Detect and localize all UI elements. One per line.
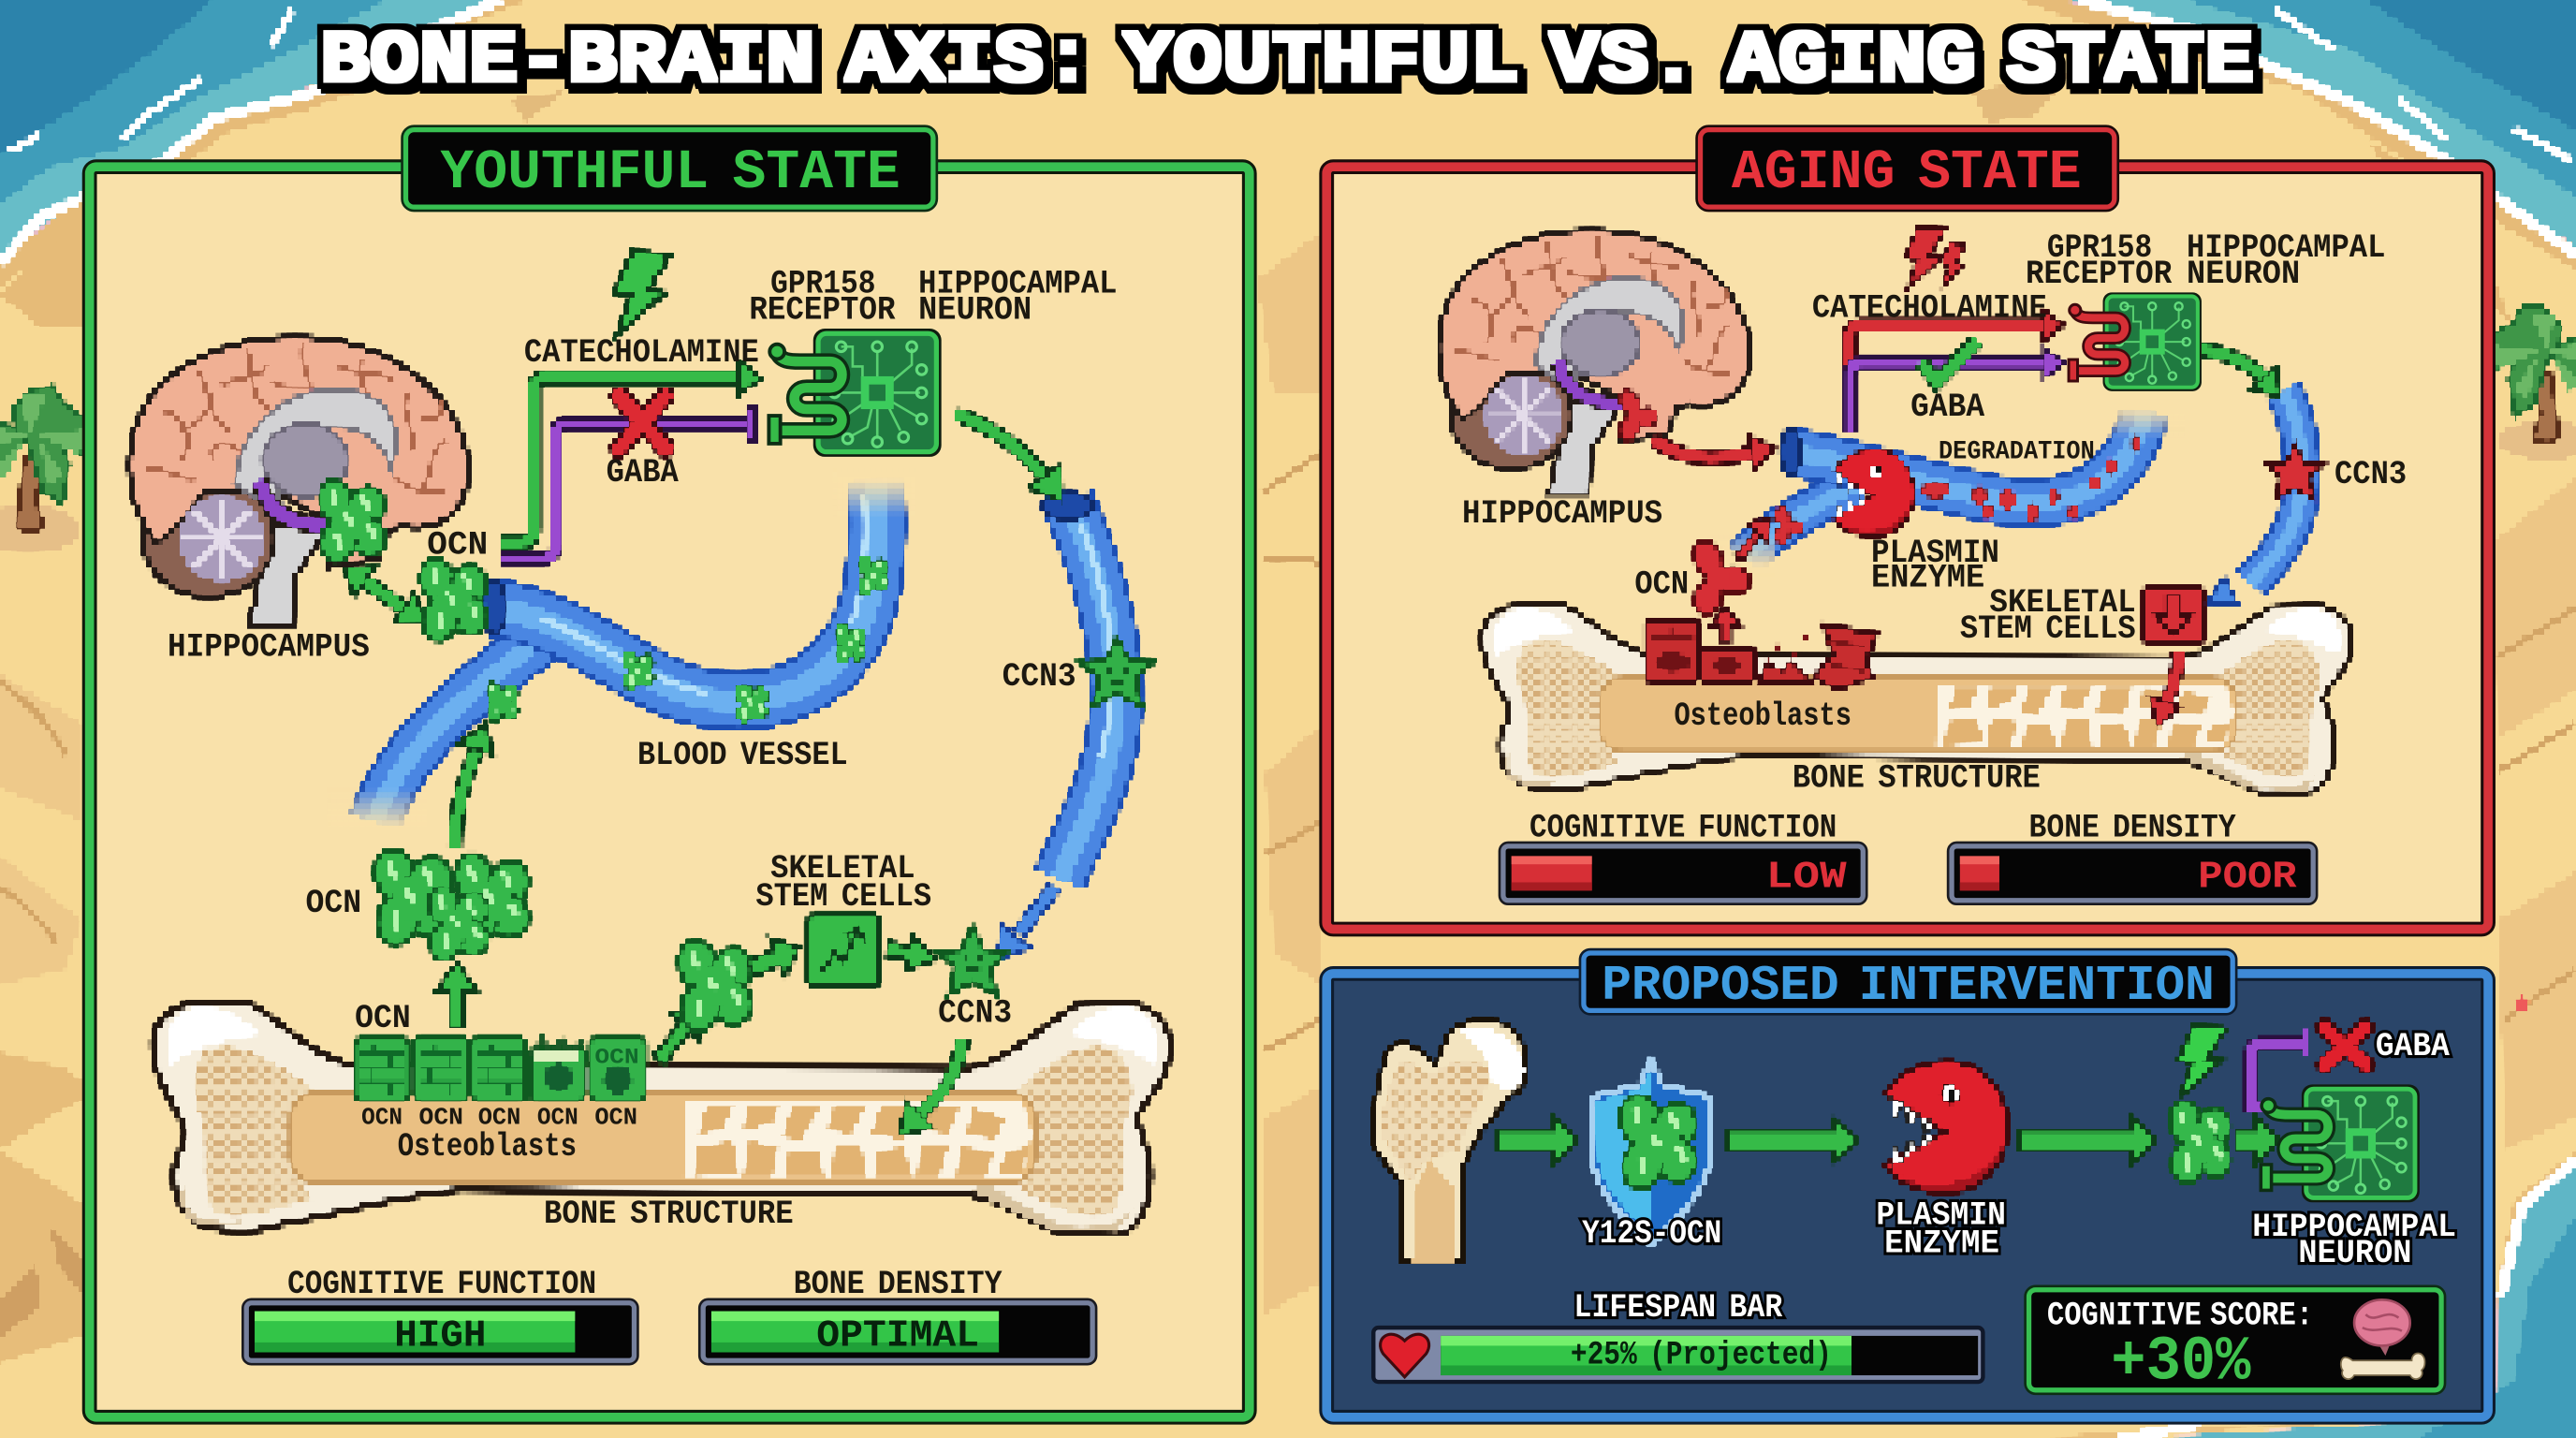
arrow: stem cells to bone	[2142, 651, 2181, 732]
label: hippocampal neuron: NEURON	[918, 291, 1032, 329]
icon: mini brain	[2354, 1299, 2410, 1356]
label: plasmin enzyme: PLASMIN	[1871, 535, 1999, 572]
label: plasmin enzyme: ENZYME	[1884, 1225, 1999, 1262]
arrow: GABA inhibition	[2250, 1030, 2310, 1108]
label: GPR158 receptor	[2026, 229, 2173, 293]
lightning bolt	[614, 252, 670, 333]
label: skeletal stem cells: STEM CELLS	[755, 878, 931, 916]
labels: OCN below cells: OCN	[594, 1046, 639, 1070]
panel: proposed intervention	[1326, 953, 2488, 1417]
label: GPR158 receptor: GPR158	[770, 265, 875, 302]
label: GPR158 receptor: RECEPTOR	[2026, 256, 2173, 293]
label: hippocampal neuron	[2187, 229, 2385, 293]
label: OCN above cells: OCN	[355, 1000, 411, 1037]
star: CCN3 on vessel	[1081, 636, 1153, 707]
icon: GPR158 receptor and neuron chip	[768, 329, 942, 457]
icon: hippocampus brain	[1439, 230, 1749, 494]
aging artwork	[1439, 227, 2351, 792]
meter: cognitive function	[1503, 809, 1863, 901]
star: CCN3	[938, 927, 1007, 994]
arrow: OCN to receptor	[2236, 1117, 2280, 1164]
label: skeletal stem cells: SKELETAL	[1989, 584, 2136, 622]
label: bone structure: BONE STRUCTURE	[1793, 760, 2041, 798]
ocean top left	[0, 0, 529, 287]
arrow: GABA	[1850, 348, 2063, 431]
meter: cognitive function	[246, 1266, 634, 1360]
arrow: catecholamine	[503, 361, 761, 542]
icon: skeletal stem cell	[809, 916, 879, 986]
panel: youthful state	[90, 130, 1250, 1417]
icon: Y12S-OCN shield	[1590, 1060, 1712, 1244]
palm tree right	[2478, 304, 2576, 460]
meter: lifespan bar: +25% (Projected)	[1571, 1337, 1832, 1374]
label: OCN clump: OCN	[305, 885, 361, 922]
label: skeletal stem cells: SKELETAL	[770, 850, 915, 888]
label: GABA: GABA	[1910, 389, 1985, 426]
label: skeletal stem cells: STEM CELLS	[1960, 610, 2136, 648]
red X	[2324, 1027, 2365, 1064]
meter: cognitive function: COGNITIVE FUNCTION	[1530, 809, 1837, 846]
arrow: OCN to stem cells	[748, 938, 798, 976]
arrow: GABA inhibited	[503, 407, 755, 559]
star: CCN3	[2267, 444, 2323, 499]
callout: cognitive score: COGNITIVE SCORE:	[2047, 1298, 2313, 1335]
arrow: plasmin to OCN	[2019, 1119, 2156, 1162]
label: hippocampus: HIPPOCAMPUS	[1462, 495, 1662, 533]
label: plasmin enzyme	[1876, 1197, 2006, 1262]
arrow: femur to shield	[1499, 1119, 1577, 1162]
title: BONE-BRAIN AXIS: YOUTHFUL VS. AGING STATE	[320, 21, 2254, 103]
panel: aging state	[1326, 130, 2488, 930]
label: catecholamine: CATECHOLAMINE	[1812, 290, 2047, 328]
arrow: CCN3 to bone	[886, 1038, 962, 1149]
panel frame	[1326, 974, 2488, 1417]
label: GPR158 receptor: RECEPTOR	[749, 291, 896, 329]
label: OCN: OCN	[1634, 566, 1689, 604]
label: CCN3: CCN3	[2334, 456, 2407, 493]
label: Y12S-OCN: Y12S-OCN	[1582, 1215, 1721, 1253]
label: plasmin enzyme: ENZYME	[1871, 560, 1984, 597]
label: plasmin enzyme: PLASMIN	[1876, 1197, 2006, 1235]
icon: stem cells down	[2144, 587, 2203, 644]
blood vessel	[1708, 401, 2184, 575]
label: hippocampal neuron: HIPPOCAMPAL	[918, 265, 1117, 302]
labels: OCN below cells: OCN	[419, 1103, 463, 1131]
label: GPR158 receptor	[749, 265, 896, 329]
arrow: stem cells to CCN3	[887, 936, 936, 970]
labels: OCN below cells: OCN	[478, 1103, 520, 1131]
icon: OCN	[2165, 1096, 2237, 1187]
icon: OCN red clump	[1689, 536, 1749, 618]
meter: bone density: BONE DENSITY	[794, 1266, 1003, 1303]
label: hippocampus: HIPPOCAMPUS	[168, 628, 370, 666]
label: GABA: GABA	[607, 454, 680, 492]
label: GABA: GABA	[2376, 1028, 2451, 1065]
red X	[620, 396, 666, 448]
youthful artwork	[129, 252, 1170, 1234]
label: osteoblasts: Osteoblasts	[398, 1128, 577, 1166]
icon: mini bone	[2341, 1354, 2425, 1379]
arrow: osteoblast to small OCN	[654, 1005, 703, 1064]
meter: lifespan bar: LIFESPAN BAR	[1573, 1289, 1783, 1327]
label: OCN: OCN	[427, 526, 488, 564]
label: hippocampal neuron: HIPPOCAMPAL	[2252, 1209, 2456, 1246]
label: hippocampal neuron: HIPPOCAMPAL	[2187, 229, 2385, 267]
label: hippocampal neuron: NEURON	[2298, 1235, 2411, 1272]
ocean top right	[2017, 0, 2576, 271]
icon: plasmin pacman	[1886, 1062, 2008, 1193]
damaged osteoblasts	[1647, 621, 1876, 690]
lightning bolts	[1906, 227, 1966, 288]
palm tree left	[0, 386, 102, 553]
meter: bone density: BONE DENSITY	[2029, 809, 2236, 846]
callout: cognitive score	[2029, 1290, 2441, 1399]
label: GPR158 receptor: GPR158	[2047, 229, 2152, 267]
label: osteoblasts: Osteoblasts	[1674, 697, 1852, 735]
label: degradation: DEGRADATION	[1939, 438, 2095, 467]
meter: bone density	[703, 1266, 1092, 1360]
second blood vessel	[984, 493, 1116, 970]
osteoblast cells	[355, 1038, 646, 1101]
arrow: brain to OCN	[334, 552, 434, 637]
arrow: OCN up to vessel	[1734, 518, 1771, 562]
arrow: chip to vessel	[2202, 350, 2292, 407]
ocean bottom right	[2119, 1158, 2576, 1438]
meter: bone density	[1952, 809, 2313, 901]
second blood vessel	[2201, 391, 2302, 616]
arrow: OCN to vessel	[455, 719, 502, 848]
arrow: neuron to vessel	[956, 414, 1078, 512]
icon: receptor and neuron chip	[2069, 292, 2202, 391]
heading: aging state: AGING STATE	[1732, 140, 2082, 204]
arrow: osteoblast up	[1710, 608, 1740, 640]
label: bone structure: BONE STRUCTURE	[544, 1196, 794, 1233]
arrow: catecholamine	[1850, 311, 2063, 370]
icon: femur	[1373, 1020, 1527, 1262]
icon: hippocampus brain	[129, 337, 468, 624]
arrow: brain to vessel	[1653, 432, 1777, 468]
starfish	[2510, 990, 2533, 1013]
meter: cognitive function: COGNITIVE FUNCTION	[287, 1266, 596, 1303]
panel frame	[1326, 167, 2488, 930]
label: CCN3: CCN3	[938, 995, 1012, 1033]
icon: heart	[1381, 1334, 1429, 1377]
heading: youthful state: YOUTHFUL STATE	[440, 140, 900, 204]
meter: lifespan bar	[1373, 1289, 1983, 1382]
meter: cognitive function: LOW	[1766, 857, 1848, 900]
arrow: shield to plasmin	[1728, 1119, 1856, 1162]
icon: large OCN clump	[369, 845, 537, 963]
panel frame	[90, 167, 1250, 1417]
label: skeletal stem cells	[755, 850, 931, 916]
label: plasmin enzyme	[1871, 535, 1999, 597]
labels: OCN below cells: OCN	[361, 1103, 402, 1131]
icon: plasmin pacman	[1834, 449, 1914, 536]
label: CCN3 on vessel: CCN3	[1003, 658, 1076, 696]
heading: proposed intervention: PROPOSED INTERVENTION	[1602, 958, 2215, 1014]
meter: bone density: OPTIMAL	[816, 1314, 979, 1357]
blood vessel	[329, 470, 916, 838]
bone	[1482, 605, 2351, 792]
meter: cognitive function: HIGH	[394, 1314, 487, 1357]
label: hippocampal neuron	[2252, 1209, 2456, 1272]
icon: lightning	[2178, 1025, 2226, 1095]
label: hippocampal neuron	[918, 265, 1117, 329]
check mark	[1921, 342, 1976, 381]
labels: OCN below cells: OCN	[537, 1103, 578, 1131]
bone	[153, 1003, 1170, 1234]
label: skeletal stem cells	[1960, 584, 2136, 648]
label: catecholamine: CATECHOLAMINE	[524, 334, 759, 372]
meter: bone density: POOR	[2198, 857, 2297, 900]
icon: small OCN clump	[673, 936, 760, 1035]
callout: cognitive score: +30%	[2111, 1328, 2251, 1399]
labels: OCN below cells	[361, 1046, 639, 1131]
icon: OCN clump	[415, 554, 495, 644]
label: blood vessel: BLOOD VESSEL	[637, 737, 848, 774]
intervention artwork	[1373, 1020, 2365, 1262]
labels: OCN below cells: OCN	[594, 1103, 637, 1131]
label: hippocampal neuron: NEURON	[2187, 256, 2300, 293]
arrow: osteoblast to OCN	[437, 962, 476, 1027]
icon: hippocampal neuron chip	[2261, 1084, 2420, 1202]
